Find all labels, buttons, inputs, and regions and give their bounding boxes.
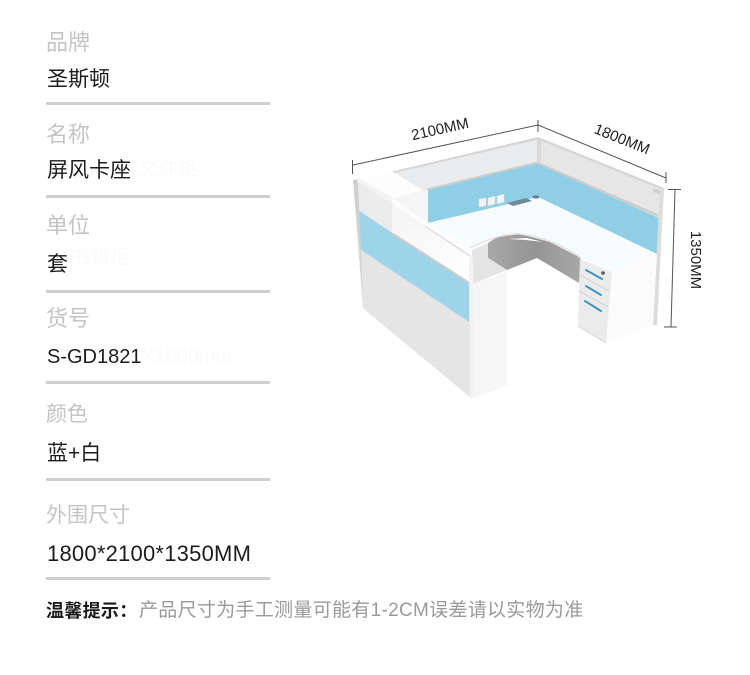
faint ghost text: name: 文件柜 [138,158,198,180]
dimension: depth [538,121,666,183]
desk top [428,195,657,272]
back wall: left section [392,137,538,223]
cable grommet [532,195,540,199]
value: brand: 圣斯顿 [47,68,110,91]
spec row: brand [46,30,270,105]
value: unit: 套 [47,253,68,276]
spec row: name [46,122,270,198]
faint ghost text: item number: X1800mm [141,346,232,368]
note text: 产品尺寸为手工测量可能有1-2CM误差请以实物为准 [139,600,584,621]
dimension: height [664,189,704,327]
spec row: outer dimensions [46,504,270,580]
cable tray [507,198,532,206]
footer note [46,600,584,621]
back wall: right section [537,137,664,325]
value: item number: S-GD1821 [47,346,142,368]
dimension: width [352,115,538,174]
end cap [473,272,507,398]
spec row: item number [46,306,270,384]
under-desk recess [472,234,581,284]
label: colour: 颜色 [46,403,88,426]
drawer lock [601,271,605,275]
label: name: 名称 [46,122,90,147]
white storage box on wall [357,172,470,255]
label: brand: 品牌 [46,30,90,55]
value: outer dimensions: 1800*2100*1350MM [47,541,251,566]
icon: wall sockets [479,194,504,207]
label: unit: 单位 [46,213,90,238]
drawer pedestal [578,255,657,343]
faint ghost text: unit: 书籍柜 [70,247,130,269]
note heading: 温馨提示： [46,601,138,621]
spec row: unit [46,213,270,293]
drawer handles [585,270,602,311]
value: name: 屏风卡座 [47,159,131,182]
label: outer dimensions: 外围尺寸 [46,504,130,527]
dimension: depth: 1800MM [592,121,652,158]
dimension: width: 2100MM [410,115,470,144]
label: item number: 货号 [46,306,90,331]
near wall with blue panel [353,179,507,398]
spec row: colour [46,403,270,481]
dimension: height: 1350MM [687,231,704,289]
value: colour: 蓝+白 [47,442,101,465]
